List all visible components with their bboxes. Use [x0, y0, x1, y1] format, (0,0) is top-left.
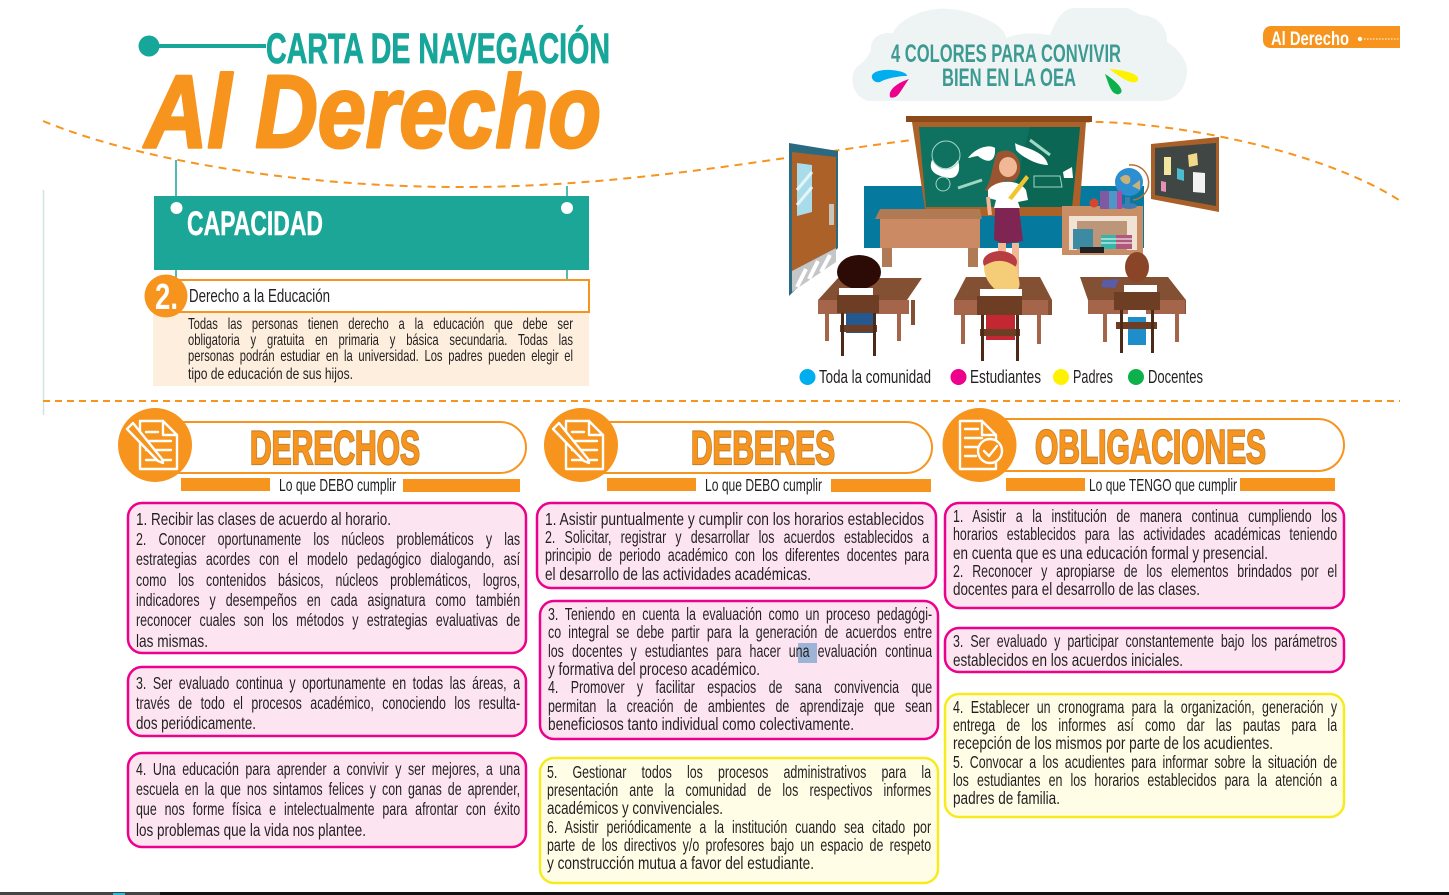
- panel: deberes 2: 4. Promover y facilitar espacios de sana convivencia que: [548, 677, 932, 697]
- panel: obligaciones 1: 1. Asistir a la institución de manera continua cumpliendo los: [953, 506, 1337, 526]
- panel: deberes 1: [537, 503, 936, 588]
- panel: deberes 3: y construcción mutua a favor del estudiante.: [547, 853, 814, 873]
- legend: colores: Toda la comunidad: [819, 366, 931, 387]
- panel: derechos 3: que nos forme física e intelectualmente para afrontar con éxito: [136, 799, 520, 819]
- panel: deberes 1: el desarrollo de las actividades académicas.: [545, 564, 811, 584]
- tag: Al Derecho: Al Derecho: [1271, 29, 1349, 50]
- heading: obligaciones: [942, 408, 1344, 495]
- panel: derechos 3: los problemas que la vida nos plantee.: [136, 820, 366, 840]
- heading: deberes: DEBERES: [691, 421, 835, 474]
- panel: derechos 1: estrategias acordes con el modelo pedagógico dialogando, así: [136, 549, 520, 569]
- panel: derechos 3: 4. Una educación para aprender a convivir y ser mejores, a una: [136, 759, 520, 779]
- panel: obligaciones 2: [945, 628, 1344, 672]
- bulletin board: [1151, 137, 1219, 212]
- cloud: 4 colores para convivir: BIEN EN LA OEA: [942, 64, 1076, 92]
- panel: deberes 3: [540, 758, 938, 883]
- heading: derechos: [118, 408, 526, 495]
- panel: obligaciones 1: en cuenta que es una educación formal y presencial.: [953, 543, 1268, 563]
- panel: derechos 1: como los contenidos básicos, núcleos problemáticos, logros,: [136, 570, 520, 590]
- heading: derechos: DERECHOS: [250, 421, 420, 474]
- panel: obligaciones 1: docentes para el desarrollo de las clases.: [953, 579, 1200, 599]
- teacher: [985, 151, 1029, 277]
- panel: derechos 1: las mismas.: [136, 631, 208, 651]
- title: Carta de navegación: [138, 24, 610, 73]
- cloud: 4 colores para convivir: [852, 8, 1187, 101]
- panel: obligaciones 3: [945, 694, 1344, 817]
- panel: deberes 2: beneficiosos tanto individual como colectivamente.: [548, 714, 854, 734]
- panel: obligaciones 3: 5. Convocar a los acudientes para informar sobre la situación de: [953, 752, 1337, 772]
- heading: obligaciones: Lo que TENGO que cumplir: [1089, 475, 1237, 495]
- panel: deberes 2: co integral se debe partir para la generación de acuerdos entre: [548, 622, 932, 642]
- panel: derechos 3: escuela en la que nos sintamos felices y con ganas de aprender,: [136, 779, 520, 799]
- panel: obligaciones 2: 3. Ser evaluado y participar constantemente bajo los parámetros: [953, 631, 1337, 651]
- panel: derechos 2: dos periódicamente.: [136, 713, 256, 733]
- panel: obligaciones 3: recepción de los mismos por parte de los acudientes.: [953, 733, 1273, 753]
- tag: Al Derecho: [1263, 26, 1400, 50]
- cloud: 4 colores para convivir: 4 COLORES PARA CONVIVIR: [891, 40, 1121, 68]
- panel: derechos 1: 2. Conocer oportunamente los núcleos problemáticos y las: [136, 529, 520, 549]
- panel: deberes 3: 5. Gestionar todos los procesos administrativos para la: [547, 762, 931, 782]
- panel: obligaciones 3: 4. Establecer un cronograma para la organización, generación y: [953, 697, 1337, 717]
- student desk centre: [954, 251, 1052, 361]
- panel: deberes 3: presentación ante la comunidad de los respectivos informes: [547, 780, 931, 800]
- panel: deberes 2: y formativa del proceso académico.: [548, 659, 760, 679]
- illustration: classroom: [789, 116, 1219, 361]
- panel: obligaciones 2: establecidos en los acuerdos iniciales.: [953, 650, 1183, 670]
- icon: document with pencil: [553, 421, 603, 469]
- panel: obligaciones 1: horarios establecidos para las actividades académicas teniendo: [953, 524, 1337, 544]
- panel: obligaciones 1: 2. Reconocer y apropiarse de los elementos brindados por el: [953, 561, 1337, 581]
- globe and books: [1090, 165, 1149, 209]
- panel: deberes 3: 6. Asistir periódicamente a la institución cuando sea citado por: [547, 817, 931, 837]
- legend: colores: [800, 366, 1203, 387]
- panel: derechos 1: 1. Recibir las clases de acuerdo al horario.: [136, 509, 391, 529]
- panel: deberes 2: 3. Teniendo en cuenta la evaluación como un proceso pedagógi-: [548, 604, 932, 624]
- panel: deberes 2: [540, 601, 938, 739]
- panel: deberes 3: académicos y convivenciales.: [547, 798, 723, 818]
- icon: document with pencil: [127, 421, 177, 469]
- panel: derechos 1: [128, 503, 526, 653]
- panel: capacidad: [154, 160, 589, 280]
- heading: derechos: Lo que DEBO cumplir: [279, 475, 396, 495]
- title: Carta de navegación: CARTA DE NAVEGACIÓN: [266, 24, 610, 73]
- panel: derechos 2: [128, 667, 526, 736]
- teacher desk: [875, 209, 982, 267]
- panel: deberes 2: permitan la creación de ambientes de aprendizaje que sean: [548, 696, 932, 716]
- heading: deberes: Lo que DEBO cumplir: [705, 475, 822, 495]
- panel: derechos 1: indicadores y desempeños en cada asignatura como también: [136, 590, 520, 610]
- panel: obligaciones 3: los estudiantes en los horarios establecidos para la atención a: [953, 770, 1337, 790]
- panel: derechos 3: [128, 753, 526, 847]
- panel: derechos 2: 3. Ser evaluado continua y oportunamente en todas las áreas, a: [136, 673, 520, 693]
- title: Al Derecho: Al Derecho: [142, 54, 601, 169]
- panel: derechos 2: través de todo el procesos académico, conociendo los resulta-: [136, 693, 520, 713]
- panel: deberes 1: 2. Solicitar, registrar y desarrollar los acuerdos establecidos a: [545, 527, 929, 547]
- blackboard: [906, 116, 1092, 216]
- panel: derecho a la educación: 2.: [155, 276, 178, 317]
- heading: obligaciones: OBLIGACIONES: [1035, 420, 1266, 473]
- panel: deberes 2: los docentes y estudiantes para hacer una evaluación continua: [548, 641, 932, 661]
- legend: colores: Padres: [1073, 366, 1113, 387]
- panel: obligaciones 3: padres de familia.: [953, 788, 1060, 808]
- shelf: [1062, 206, 1143, 255]
- icon: document with check: [960, 421, 1002, 469]
- panel: deberes 3: parte de los directivos y/o profesores bajo un espacio de respeto: [547, 835, 931, 855]
- student desk right: [1080, 252, 1186, 353]
- door: [789, 143, 838, 296]
- panel: derecho a la educación: tipo de educación de sus hijos.: [188, 366, 353, 383]
- panel: derecho a la educación: Todas las personas tienen derecho a la educación que debe ser: [188, 316, 573, 333]
- panel: obligaciones 1: [945, 503, 1344, 608]
- panel: derecho a la educación: obligatoria y gratuita en primaria y básica secundaria. Todas las: [188, 332, 573, 349]
- panel: derecho a la educación: Derecho a la Educación: [189, 286, 330, 306]
- student desk left: [818, 255, 922, 356]
- legend: colores: Docentes: [1148, 366, 1203, 387]
- panel: deberes 1: 1. Asistir puntualmente y cumplir con los horarios establecidos: [545, 509, 924, 529]
- panel: derecho a la educación: personas podrán estudiar en la universidad. Los padres pueden elegir el: [188, 348, 573, 365]
- panel: derecho a la educación: [144, 274, 589, 386]
- legend: colores: Estudiantes: [970, 366, 1041, 387]
- panel: obligaciones 3: entrega de los informes así como dar las pautas para la: [953, 715, 1337, 735]
- panel: deberes 1: principio de periodo académico con los diferentes docentes para: [545, 545, 929, 565]
- panel: derechos 1: reconocer cuales son los métodos y estrategias evaluativas de: [136, 610, 520, 630]
- panel: capacidad: CAPACIDAD: [187, 205, 323, 243]
- heading: deberes: [544, 408, 932, 495]
